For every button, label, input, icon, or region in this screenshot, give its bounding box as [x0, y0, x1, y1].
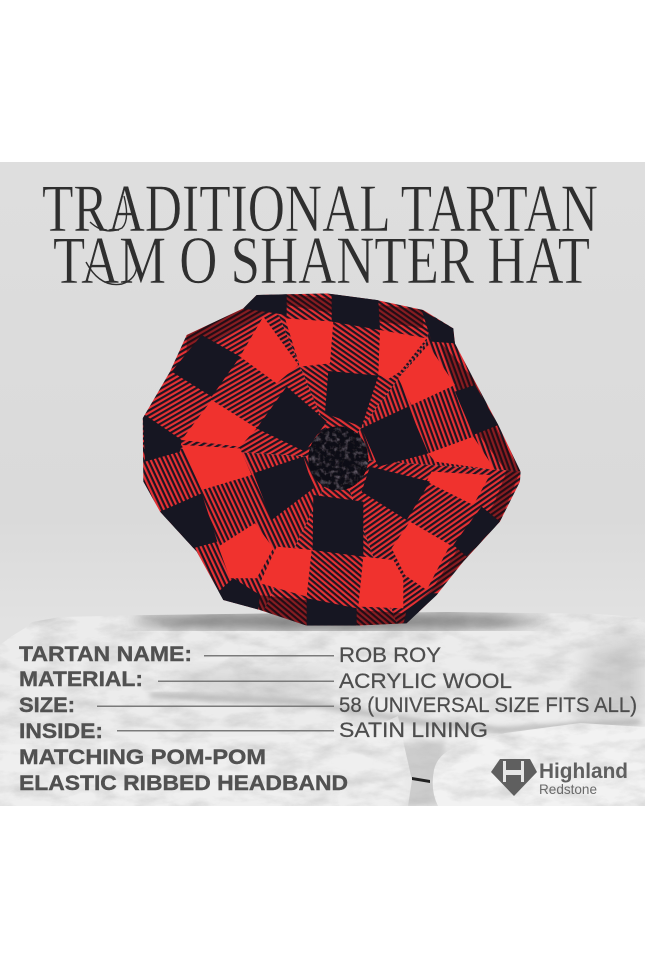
red checks [182, 317, 495, 608]
lower right rock [433, 723, 645, 806]
tam o shanter hat [142, 293, 521, 626]
hatch wedge lower left [142, 446, 324, 612]
middle slab shading [170, 670, 340, 698]
spec row: tartan name [19, 643, 441, 667]
spec row: tartan name: TARTAN NAME: [19, 643, 192, 666]
feature: matching pom-pom: MATCHING POM-POM [19, 746, 266, 769]
gap dark mark [412, 777, 430, 783]
logo: Highland Redstone: Redstone [539, 781, 597, 797]
rock texture [0, 610, 645, 807]
feature: elastic ribbed headband: ELASTIC RIBBED HEADBAND [19, 772, 348, 795]
spec row: inside [19, 719, 488, 743]
spec row: material: MATERIAL: [19, 668, 143, 691]
spec row: tartan name: ROB ROY [339, 644, 441, 667]
hatch wedge top [270, 293, 432, 434]
background panel [0, 162, 645, 806]
hatch wedge bottom [263, 486, 397, 626]
pom-pom [308, 426, 368, 490]
spec row: inside: INSIDE: [19, 720, 103, 743]
spec row: size: SIZE: [19, 694, 75, 717]
spec row: size: 58 (UNIVERSAL SIZE FITS ALL) [339, 694, 637, 717]
title [42, 170, 598, 298]
spec row: inside: SATIN LINING [339, 719, 488, 742]
lower left rock [386, 716, 412, 806]
shadow under hat [130, 613, 540, 629]
logo: Highland Redstone: Highland [539, 760, 628, 783]
rock platform [0, 610, 645, 807]
hatch wedge upper right [357, 316, 520, 472]
right rock ledge shading [585, 630, 645, 725]
spec row: size [19, 694, 637, 717]
spec row: material [19, 668, 512, 693]
infographic canvas [0, 162, 645, 806]
logo: Highland Redstone [491, 759, 628, 797]
spec row: material: ACRYLIC WOOL [339, 670, 512, 693]
black checks [143, 293, 500, 627]
dark rim [187, 293, 520, 625]
hatch wedge lower right [338, 458, 547, 652]
upper slab seam [150, 695, 640, 730]
gap between rocks [400, 740, 445, 806]
hatch wedge upper left [142, 294, 326, 456]
